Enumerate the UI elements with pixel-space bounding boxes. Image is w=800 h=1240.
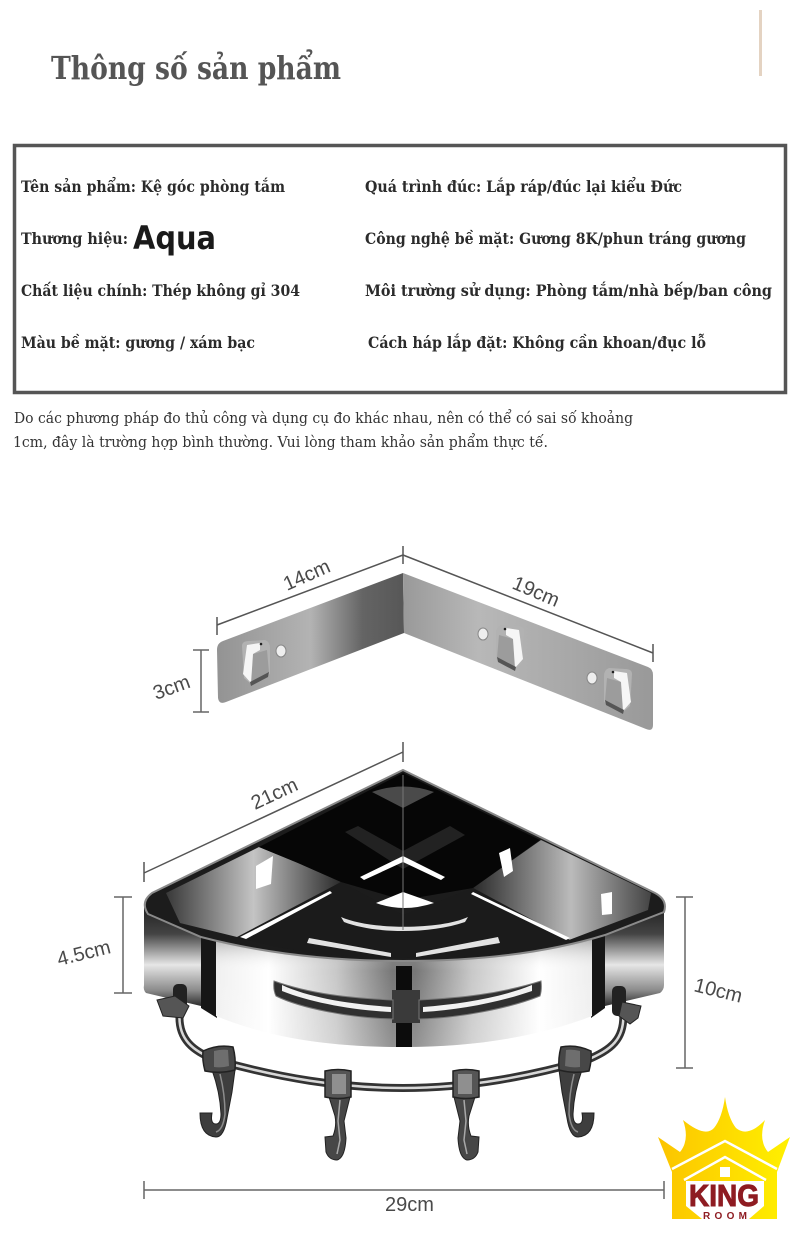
note text: 1cm, đây là trường hợp bình thường. Vui lòng tham khảo sản phẩm thực tế. — [13, 433, 548, 451]
shelf cutouts — [240, 775, 612, 957]
note text — [13, 409, 633, 451]
note text: Do các phương pháp đo thủ công và dụng cụ đo khác nhau, nên có thể có sai số khoảng — [14, 409, 633, 427]
dimension: 29cm — [144, 1181, 664, 1216]
shelf rail clips — [157, 984, 641, 1024]
spec: brand label: Thương hiệu: — [21, 229, 128, 248]
band center marks — [392, 966, 420, 1047]
spec: casting process: Quá trình đúc: Lắp ráp/đúc lại kiểu Đức — [365, 175, 682, 196]
shelf lower floor — [240, 882, 570, 958]
dimension: 21cm: 21cm — [248, 774, 301, 815]
dimension: 14cm — [217, 546, 403, 635]
bracket right plate — [403, 573, 653, 730]
logo white panel — [686, 1181, 764, 1219]
logo subtitle: ROOM — [703, 1211, 747, 1222]
dimension: 4.5cm: 4.5cm — [55, 936, 113, 971]
spec: surface colour: Màu bề mặt: gương / xám bạc — [21, 333, 255, 352]
panel: product specifications — [14, 146, 786, 392]
bracket left plate — [217, 573, 404, 703]
dimension: 19cm — [403, 555, 653, 662]
dimension: 3cm — [150, 650, 209, 712]
shelf rim — [145, 770, 665, 961]
logo roof — [672, 1141, 777, 1180]
band slots — [274, 981, 541, 1019]
diagram: wall bracket — [150, 546, 653, 730]
shelf black floor — [259, 773, 540, 900]
bracket hooks — [242, 625, 632, 714]
spec: main material: Chất liệu chính: Thép không gỉ 304 — [21, 281, 300, 300]
title: Thông số sản phẩm — [51, 48, 341, 87]
dimension: 19cm: 19cm — [509, 572, 563, 612]
shelf interior walls — [166, 847, 341, 937]
dimension: 14cm: 14cm — [280, 556, 334, 596]
spec: installation: Cách háp lắp đặt: Không cần khoan/đục lỗ — [368, 332, 706, 352]
spec: usage environment: Môi trường sử dụng: Phòng tắm/nhà bếp/ban công — [365, 280, 772, 300]
dimension: 10cm: 10cm — [692, 975, 745, 1008]
dimension: 10cm — [676, 897, 745, 1068]
band black edges — [201, 935, 217, 1018]
logo wordmark: KING — [689, 1178, 759, 1213]
logo: King Room — [658, 1097, 790, 1222]
logo crown — [658, 1097, 790, 1219]
decorative beige line top right — [759, 10, 762, 76]
shelf front band — [216, 938, 592, 1047]
dimension: 21cm — [144, 742, 403, 882]
dimension: 3cm: 3cm — [150, 671, 193, 705]
shelf hooks — [200, 1046, 594, 1160]
shelf rail — [179, 1010, 623, 1088]
diagram: corner shelf — [55, 742, 745, 1216]
dimension: 29cm: 29cm — [385, 1194, 434, 1216]
shelf body sides — [144, 903, 201, 1006]
spec: brand name: Aqua — [133, 219, 216, 257]
dimension: 4.5cm — [55, 897, 132, 993]
spec: surface technology: Công nghệ bề mặt: Gương 8K/phun tráng gương — [365, 229, 746, 248]
logo window — [720, 1167, 730, 1177]
spec: product name: Tên sản phẩm: Kệ góc phòng tắm — [21, 175, 285, 196]
